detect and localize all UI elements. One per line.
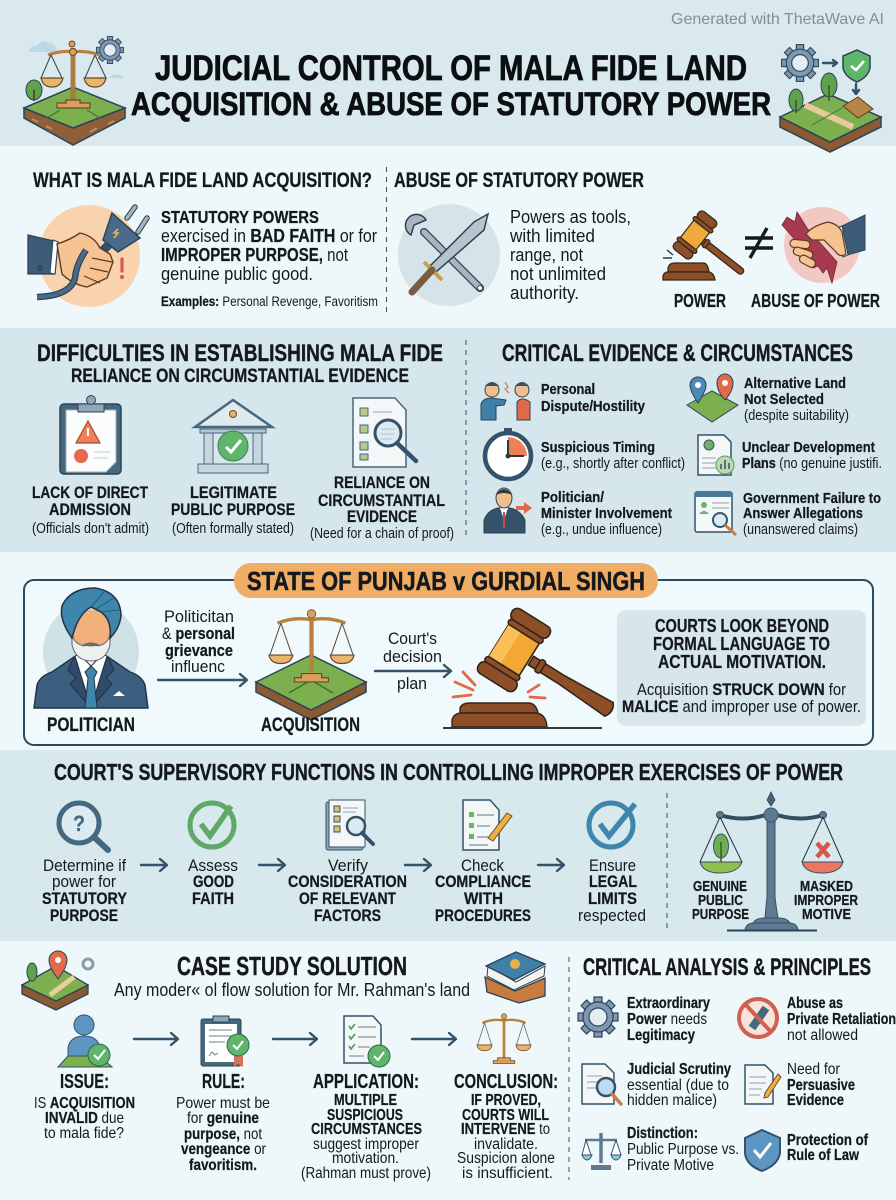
icon: person with check	[58, 1015, 112, 1067]
arrow	[273, 1033, 317, 1045]
item text: Plans (no genuine justifi.	[742, 456, 882, 472]
text	[454, 1071, 558, 1182]
icon: magnifier question: ?	[73, 811, 85, 836]
icon: clipboard warning	[60, 396, 121, 474]
label: legitimate public purpose	[171, 483, 295, 537]
icon: wrench and sword	[398, 204, 500, 306]
tools text: Powers as tools,	[510, 207, 631, 227]
subheading: RELIANCE ON CIRCUMSTANTIAL EVIDENCE	[71, 366, 409, 387]
item text: Minister Involvement	[541, 506, 672, 522]
icon: green check circle	[190, 803, 234, 847]
arrow text: court's decision	[383, 629, 442, 693]
item text: (unanswered claims)	[743, 522, 858, 538]
label: reliance on circumstantial evidence: RELIANCE ON	[334, 473, 430, 492]
item text: Government Failure to	[743, 491, 881, 507]
text	[627, 1061, 731, 1109]
panel: case study solution	[22, 951, 558, 1182]
text: Evidence	[787, 1092, 844, 1109]
icon: document with pencil	[463, 800, 512, 850]
text: motivation.	[332, 1150, 399, 1167]
conclusion step	[454, 1014, 558, 1182]
text: MULTIPLE	[334, 1092, 397, 1109]
icon: document with pencil	[745, 1065, 781, 1104]
text: Rule of Law	[787, 1147, 860, 1164]
arrow text: politician influence: Politicitan	[164, 607, 234, 626]
arrow	[375, 665, 451, 677]
step: good faith	[188, 856, 238, 908]
item text	[742, 440, 882, 472]
icon: document with magnifier	[582, 1064, 621, 1104]
panel: critical evidence	[481, 340, 882, 538]
panel: critical analysis	[578, 954, 896, 1174]
issue step	[34, 1015, 135, 1142]
icon: checklist with magnifier	[326, 800, 373, 850]
text	[787, 1061, 855, 1109]
icon: stopwatch	[485, 428, 531, 479]
callout: FORMAL LANGUAGE TO	[653, 633, 830, 654]
arrow	[412, 1033, 456, 1045]
text: not allowed	[787, 1027, 858, 1044]
step: good faith: GOOD	[193, 872, 234, 891]
icon: prohibited plug	[739, 999, 777, 1037]
label: reliance on circumstantial evidence: (Need for a chain of proof)	[310, 525, 454, 542]
text: ISSUE:	[60, 1071, 109, 1093]
step: relevant factors: Verify	[328, 856, 368, 875]
title: ACQUISITION & ABUSE OF STATUTORY POWER	[131, 86, 771, 122]
text: Power needs	[627, 1011, 707, 1028]
title	[131, 49, 771, 122]
label: reliance on circumstantial evidence: CIRCUMSTANTIAL	[318, 491, 445, 510]
item text: Alternative Land	[744, 376, 846, 392]
icon: scales on land	[24, 36, 125, 145]
text: essential (due to	[627, 1077, 729, 1094]
text: hidden malice)	[627, 1092, 717, 1109]
arrow	[134, 1033, 178, 1045]
text	[34, 1071, 135, 1142]
tools text: with limited	[509, 226, 595, 246]
text: for genuine	[187, 1110, 259, 1127]
panel: difficulties	[32, 340, 454, 542]
callout	[617, 610, 866, 726]
label: acquisition: ACQUISITION	[261, 715, 360, 736]
text: Private Motive	[627, 1157, 714, 1174]
arrow text: court's decision: decision	[383, 647, 442, 666]
text: Abuse as	[787, 995, 843, 1012]
not-equal sign	[745, 228, 773, 258]
icon: politician with arrow	[484, 488, 532, 533]
definition text: IMPROPER PURPOSE, not	[161, 245, 348, 265]
item text: Suspicious Timing	[541, 440, 655, 456]
text: Persuasive	[787, 1077, 855, 1094]
case frame	[24, 580, 873, 745]
arrow	[259, 859, 285, 871]
label: reliance on circumstantial evidence	[310, 473, 454, 542]
step: compliance	[435, 856, 531, 925]
step: relevant factors: FACTORS	[314, 906, 381, 925]
step: compliance: COMPLIANCE	[435, 872, 531, 891]
watermark: Generated with ThetaWave AI	[671, 11, 884, 28]
text: CIRCUMSTANCES	[311, 1121, 422, 1138]
icon: shield with check	[745, 1130, 780, 1171]
text: favoritism.	[189, 1157, 257, 1174]
text: SUSPICIOUS	[327, 1107, 403, 1124]
panel: abuse of statutory power	[394, 169, 880, 311]
panel: what is mala fide	[28, 169, 378, 309]
text: is insufficient.	[462, 1165, 553, 1182]
heading pill: STATE OF PUNJAB v GURDIAL SINGH	[247, 566, 645, 596]
arrow text: court's decision: Court's	[388, 629, 437, 648]
text: Need for	[787, 1061, 840, 1078]
text: Power must be	[176, 1095, 270, 1112]
icon: large gavel	[443, 606, 632, 743]
icon: checklist with check	[344, 1016, 390, 1067]
icon: fist crushing paper	[782, 207, 865, 283]
icon: gavel for power	[663, 209, 758, 291]
icon: gear, shield and land parcel	[780, 45, 881, 152]
icon: balance of purpose and motive	[700, 792, 843, 930]
arrow text: politician influence: influenc	[171, 657, 225, 676]
item text: (e.g., shortly after conflict)	[541, 456, 685, 472]
step: good faith: Assess	[188, 856, 238, 875]
step: legal limits: Ensure	[589, 856, 636, 875]
item text: Personal	[541, 382, 595, 398]
divider	[568, 957, 570, 1180]
text: Suspicion alone	[457, 1150, 555, 1167]
icon: small scales	[582, 1133, 621, 1170]
label: masked improper motive: MOTIVE	[802, 907, 851, 923]
label: lack of direct admission: ADMISSION	[49, 500, 131, 519]
text: Public Purpose vs.	[627, 1141, 739, 1158]
label: genuine public purpose	[692, 879, 749, 923]
step: compliance: Check	[461, 856, 504, 875]
panel: state of punjab case	[24, 563, 873, 745]
section 3 background	[0, 552, 896, 750]
arrow text: politician influence: grievance	[165, 641, 233, 660]
text: IF PROVED,	[471, 1092, 541, 1109]
item text	[541, 382, 645, 415]
tools text: range, not	[510, 245, 583, 265]
text: CONCLUSION:	[454, 1071, 558, 1093]
step: statutory purpose: PURPOSE	[50, 906, 118, 925]
text: Legitimacy	[627, 1027, 695, 1044]
callout: ACTUAL MOTIVATION.	[658, 651, 826, 672]
text	[627, 995, 710, 1044]
step: statutory purpose: power for	[52, 872, 116, 891]
step: compliance: PROCEDURES	[435, 906, 531, 925]
icon: hand gripping plug	[28, 205, 147, 307]
text: Extraordinary	[627, 995, 710, 1012]
step: legal limits: respected	[578, 906, 646, 925]
icon: magnifier question	[59, 803, 108, 850]
icon: land with location pin	[22, 951, 93, 1010]
label: politician: POLITICIAN	[47, 715, 135, 736]
heading: CASE STUDY SOLUTION	[177, 951, 407, 981]
definition text: genuine public good.	[161, 264, 313, 284]
step: legal limits: LEGAL	[589, 872, 637, 891]
section 2 background	[0, 328, 896, 552]
text: Distinction:	[627, 1125, 698, 1142]
icon: court building with check	[195, 400, 272, 473]
callout: COURTS LOOK BEYOND	[655, 615, 829, 636]
arrow	[538, 859, 564, 871]
heading: DIFFICULTIES IN ESTABLISHING MALA FIDE	[37, 340, 443, 367]
label: genuine public purpose: PUBLIC	[698, 893, 743, 909]
definition text: STATUTORY POWERS	[161, 207, 319, 227]
arrow	[141, 859, 167, 871]
step: compliance: WITH	[464, 889, 503, 908]
callout: Acquisition STRUCK DOWN for	[637, 680, 846, 699]
rule step	[176, 1016, 270, 1174]
label: reliance on circumstantial evidence: EVIDENCE	[347, 507, 417, 526]
divider	[386, 167, 388, 312]
item text: Unclear Development	[742, 440, 875, 456]
text	[301, 1071, 431, 1182]
panel: supervisory functions	[42, 759, 858, 930]
icon: scales	[477, 1014, 531, 1064]
label: lack of direct admission: (Officials don't admit)	[32, 520, 149, 537]
text: RULE:	[202, 1071, 245, 1093]
label: legitimate public purpose: LEGITIMATE	[190, 483, 277, 502]
text: COURTS WILL	[462, 1107, 549, 1124]
text	[176, 1071, 270, 1174]
section 1 background	[0, 146, 896, 328]
icon: politician in turban	[34, 588, 148, 708]
tools text	[509, 207, 631, 303]
text: IS ACQUISITION	[34, 1095, 135, 1112]
subheading: Any moder« ol flow solution for Mr. Rahman's land	[114, 980, 470, 1000]
icon: document with chart	[698, 435, 734, 475]
icon: document with magnifier	[353, 398, 416, 467]
item text	[541, 490, 672, 538]
step: statutory purpose: Determine if	[43, 856, 126, 875]
arrow text: politician influence	[162, 607, 235, 676]
step: statutory purpose	[42, 856, 128, 925]
text: Judicial Scrutiny	[627, 1061, 731, 1078]
item text	[744, 376, 849, 424]
text: purpose, not	[184, 1126, 262, 1143]
step: relevant factors: OF RELEVANT	[299, 889, 397, 908]
item text: Dispute/Hostility	[541, 399, 645, 415]
application step	[301, 1016, 431, 1182]
text	[627, 1125, 739, 1174]
step: legal limits: LIMITS	[588, 889, 637, 908]
item text: (e.g., undue influence)	[541, 522, 662, 538]
item text: Answer Allegations	[743, 506, 863, 522]
tools text: authority.	[510, 283, 579, 303]
label: masked improper motive: MASKED	[800, 879, 853, 895]
definition text	[161, 207, 378, 309]
label: masked improper motive: IMPROPER	[794, 893, 858, 909]
definition text: Examples: Personal Revenge, Favoritism	[161, 294, 378, 309]
text: invalidate.	[474, 1136, 538, 1153]
text: (Rahman must prove)	[301, 1165, 431, 1182]
step: relevant factors: CONSIDERATION	[288, 872, 407, 891]
item text	[743, 491, 881, 538]
arrow text: court's decision: plan	[397, 674, 427, 693]
icon: window with magnifier	[695, 492, 736, 535]
section 5 background	[0, 941, 896, 1200]
label: genuine public purpose: PURPOSE	[692, 907, 749, 923]
icon: two people arguing	[481, 382, 530, 420]
heading: WHAT IS MALA FIDE LAND ACQUISITION?	[33, 169, 372, 192]
text: Protection of	[787, 1132, 869, 1149]
text: suggest improper	[313, 1136, 419, 1153]
icon: clipboard with seal	[201, 1016, 249, 1067]
definition text: exercised in BAD FAITH or for	[161, 226, 377, 246]
icon: map with pins	[687, 374, 738, 422]
callout: MALICE and improper use of power.	[622, 697, 861, 716]
divider	[666, 793, 668, 928]
section 4 background	[0, 750, 896, 941]
step: relevant factors	[288, 856, 407, 925]
label: genuine public purpose: GENUINE	[693, 879, 747, 895]
label: lack of direct admission	[32, 483, 149, 537]
icon: blue check circle	[589, 803, 635, 847]
label: power: POWER	[674, 291, 726, 311]
tools text: not unlimited	[510, 264, 606, 284]
step: statutory purpose: STATUTORY	[42, 889, 128, 908]
icon: scales on land	[256, 610, 366, 720]
label: legitimate public purpose: PUBLIC PURPOSE	[171, 500, 295, 519]
text	[787, 995, 896, 1044]
icon: gear	[578, 997, 618, 1037]
text: INVALID due	[45, 1110, 124, 1127]
item text: Politician/	[541, 490, 604, 506]
label: masked improper motive	[794, 879, 858, 923]
item text: Not Selected	[744, 392, 824, 408]
arrow	[405, 859, 431, 871]
heading: ABUSE OF STATUTORY POWER	[394, 169, 644, 192]
text: APPLICATION:	[313, 1071, 419, 1093]
label: legitimate public purpose: (Often formally stated)	[172, 520, 294, 537]
step: legal limits	[578, 856, 646, 925]
text: vengeance or	[181, 1141, 267, 1158]
icon: stacked books	[485, 952, 545, 1003]
divider	[465, 340, 467, 540]
text: to mala fide?	[44, 1125, 124, 1142]
text	[787, 1132, 869, 1164]
arrow text: politician influence: & personal	[162, 624, 235, 643]
item text	[541, 440, 685, 472]
header background band	[0, 0, 896, 146]
text: INTERVENE to	[461, 1121, 550, 1138]
title: JUDICIAL CONTROL OF MALA FIDE LAND	[155, 49, 747, 88]
label: lack of direct admission: LACK OF DIRECT	[32, 483, 148, 502]
item text: (despite suitability)	[744, 408, 849, 424]
step: good faith: FAITH	[192, 889, 234, 908]
arrow	[158, 674, 247, 686]
